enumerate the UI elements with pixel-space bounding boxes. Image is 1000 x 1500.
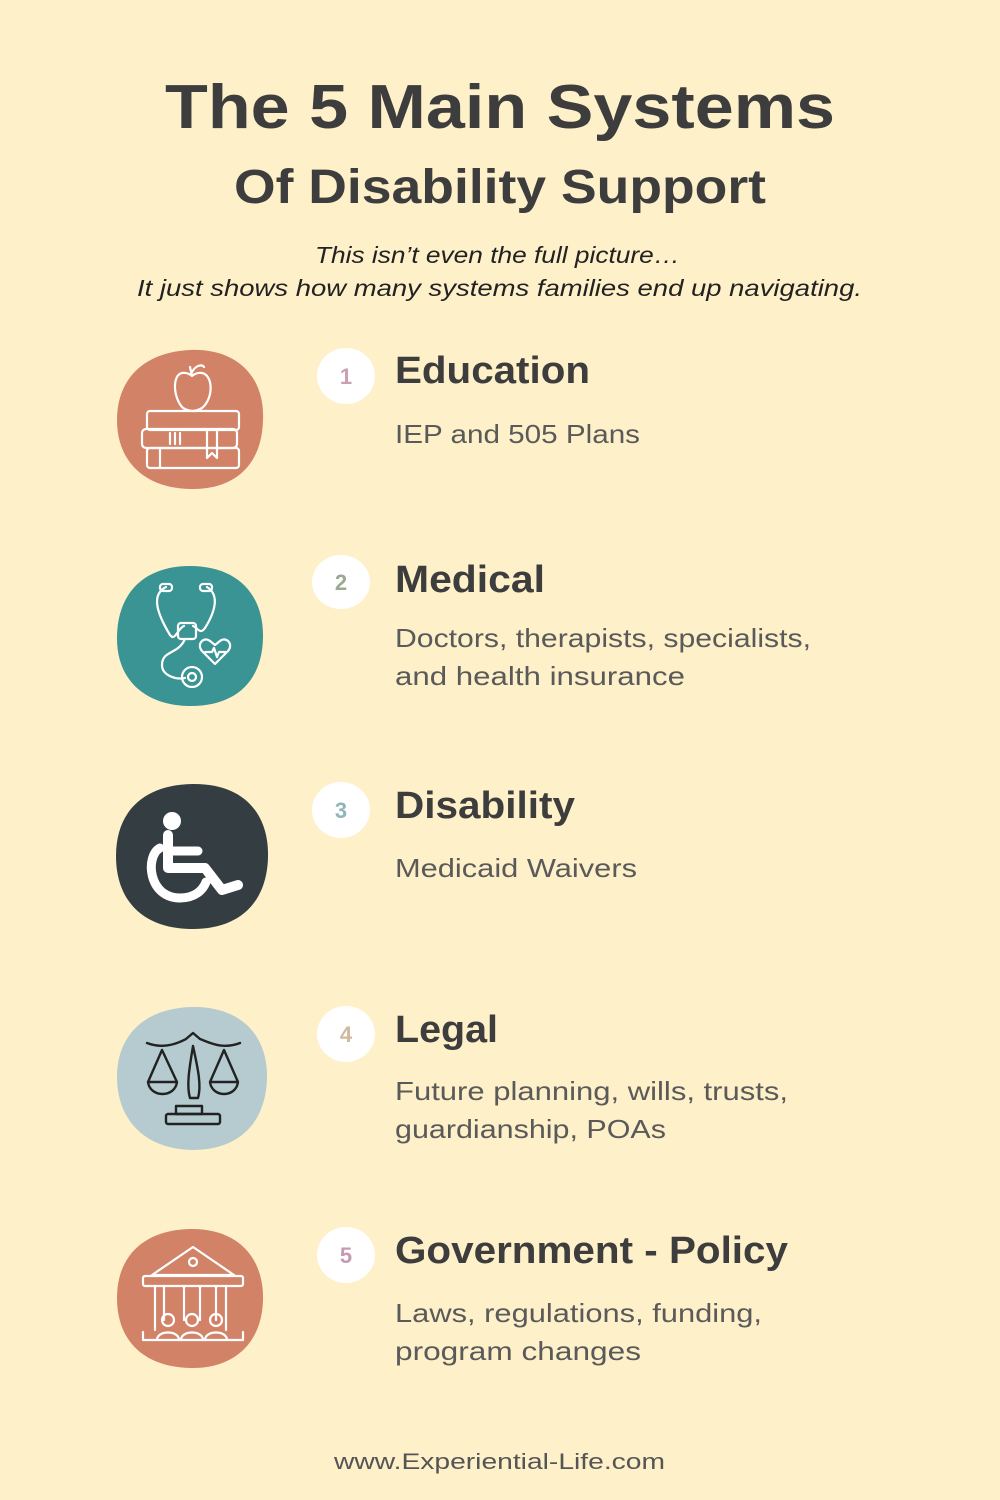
text: legal details	[395, 1076, 788, 1144]
text: government details: program changes	[395, 1336, 641, 1366]
badge 1	[317, 348, 375, 404]
intro text: This isn’t even the full picture…	[315, 242, 680, 268]
heading: Disability: Disability	[395, 785, 575, 827]
badge 2: 2	[335, 570, 347, 595]
text: legal details: Future planning, wills, trusts,	[395, 1076, 788, 1106]
title: The 5 Main Systems	[165, 73, 835, 142]
section 1: education	[117, 348, 640, 489]
text: Medicaid: Medicaid Waivers	[395, 853, 637, 883]
badge 4: 4	[340, 1022, 353, 1047]
badge 3: 3	[335, 798, 347, 823]
text: medical details	[395, 623, 811, 691]
badge 2	[312, 555, 370, 609]
subtitle: Of Disability Support	[234, 161, 766, 214]
badge 3	[312, 782, 370, 838]
text: legal details: guardianship, POAs	[395, 1114, 666, 1144]
intro text	[137, 242, 862, 301]
text: government details	[395, 1298, 762, 1366]
section 2: medical	[117, 555, 811, 706]
icon: scales	[117, 1007, 267, 1150]
text: government details: Laws, regulations, funding,	[395, 1298, 762, 1328]
section 5: government	[117, 1227, 788, 1368]
heading: Government - Policy: Government - Policy	[395, 1230, 788, 1272]
badge 1: 1	[340, 364, 352, 389]
section 3: disability	[116, 782, 637, 929]
text: IEP: IEP and 505 Plans	[395, 419, 640, 449]
icon: wheelchair	[116, 784, 268, 929]
text: medical details: Doctors, therapists, specialists,	[395, 623, 811, 653]
badge 4	[317, 1006, 375, 1062]
intro text: It just shows how many systems families end up navigating.	[137, 275, 862, 301]
badge 5	[317, 1227, 375, 1283]
heading: Education: Education	[395, 350, 590, 392]
badge 5: 5	[340, 1243, 352, 1268]
heading: Medical: Medical	[395, 559, 545, 601]
text: medical details: and health insurance	[395, 661, 685, 691]
footer: website: www.Experiential-Life.com	[333, 1449, 665, 1474]
icon: government building	[117, 1229, 263, 1368]
icon: stethoscope	[117, 566, 263, 706]
section 4: legal	[117, 1006, 788, 1150]
icon: books and apple	[117, 350, 263, 489]
heading: Legal: Legal	[395, 1009, 498, 1051]
